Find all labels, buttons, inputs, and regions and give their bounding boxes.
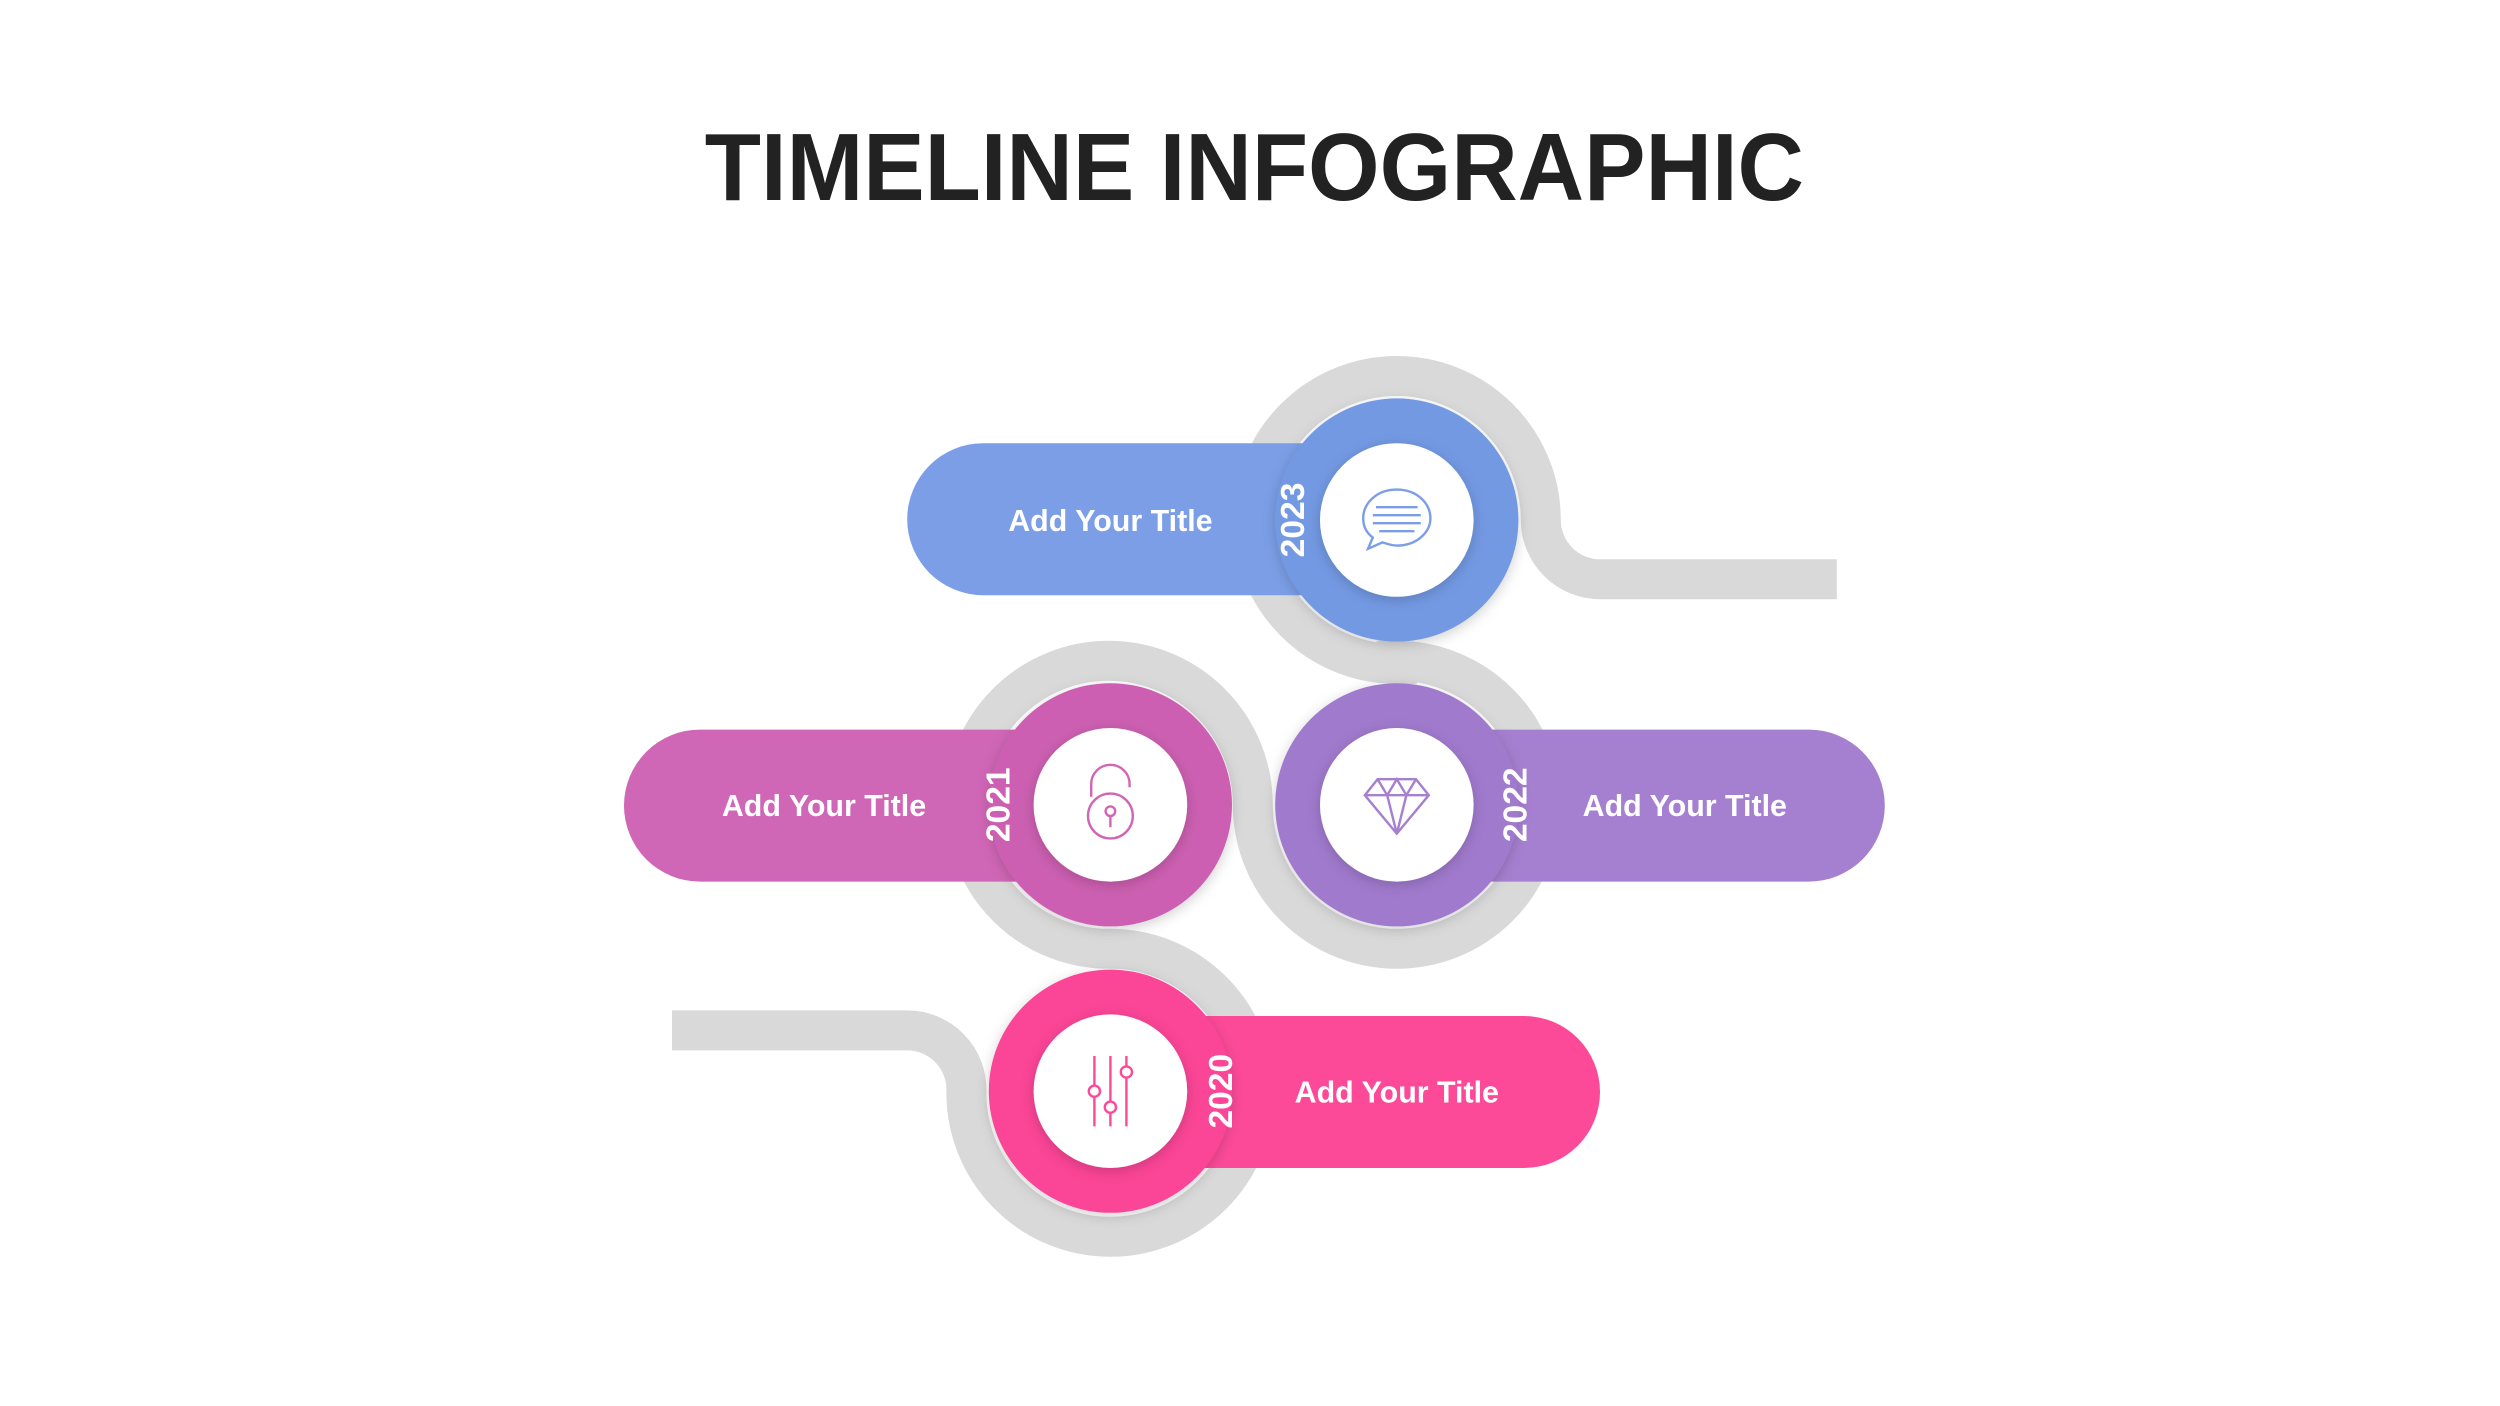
pill: 2023	[907, 443, 1419, 595]
ring: 2020	[989, 970, 1232, 1213]
title: TIMELINE INFOGRAPHIC	[705, 114, 1804, 221]
ring: 2021	[989, 683, 1232, 926]
title text: 2022: Add Your Title	[1583, 789, 1787, 823]
pill: 2022	[1376, 730, 1885, 882]
icon: lock	[1088, 765, 1133, 838]
ring: 2023	[1275, 398, 1518, 642]
milestone 2022	[1275, 683, 1885, 926]
icon: sliders	[1089, 1056, 1132, 1126]
milestone 2021	[624, 683, 1232, 926]
milestone 2023	[907, 398, 1518, 642]
milestone 2020	[989, 970, 1600, 1213]
title text: 2023: Add Your Title	[1008, 504, 1213, 538]
white disc: 2021	[1034, 728, 1187, 882]
year: 2020: 2020	[1203, 1054, 1240, 1129]
title text: 2021: Add Your Title	[722, 789, 926, 823]
year: 2022: 2022	[1497, 767, 1534, 842]
white disc: 2023	[1320, 443, 1474, 597]
pill: 2021	[624, 730, 1136, 882]
icon: diamond	[1365, 779, 1429, 834]
white disc: 2020	[1034, 1014, 1187, 1168]
year: 2023: 2023	[1275, 483, 1312, 557]
ring: 2022	[1275, 683, 1518, 926]
gray timeline track	[672, 376, 1837, 1237]
pill: 2020	[1088, 1016, 1600, 1168]
title text: 2020: Add Your Title	[1295, 1075, 1499, 1109]
white disc: 2022	[1320, 728, 1474, 882]
icon: speech bubble	[1363, 490, 1430, 549]
year: 2021: 2021	[981, 767, 1018, 842]
